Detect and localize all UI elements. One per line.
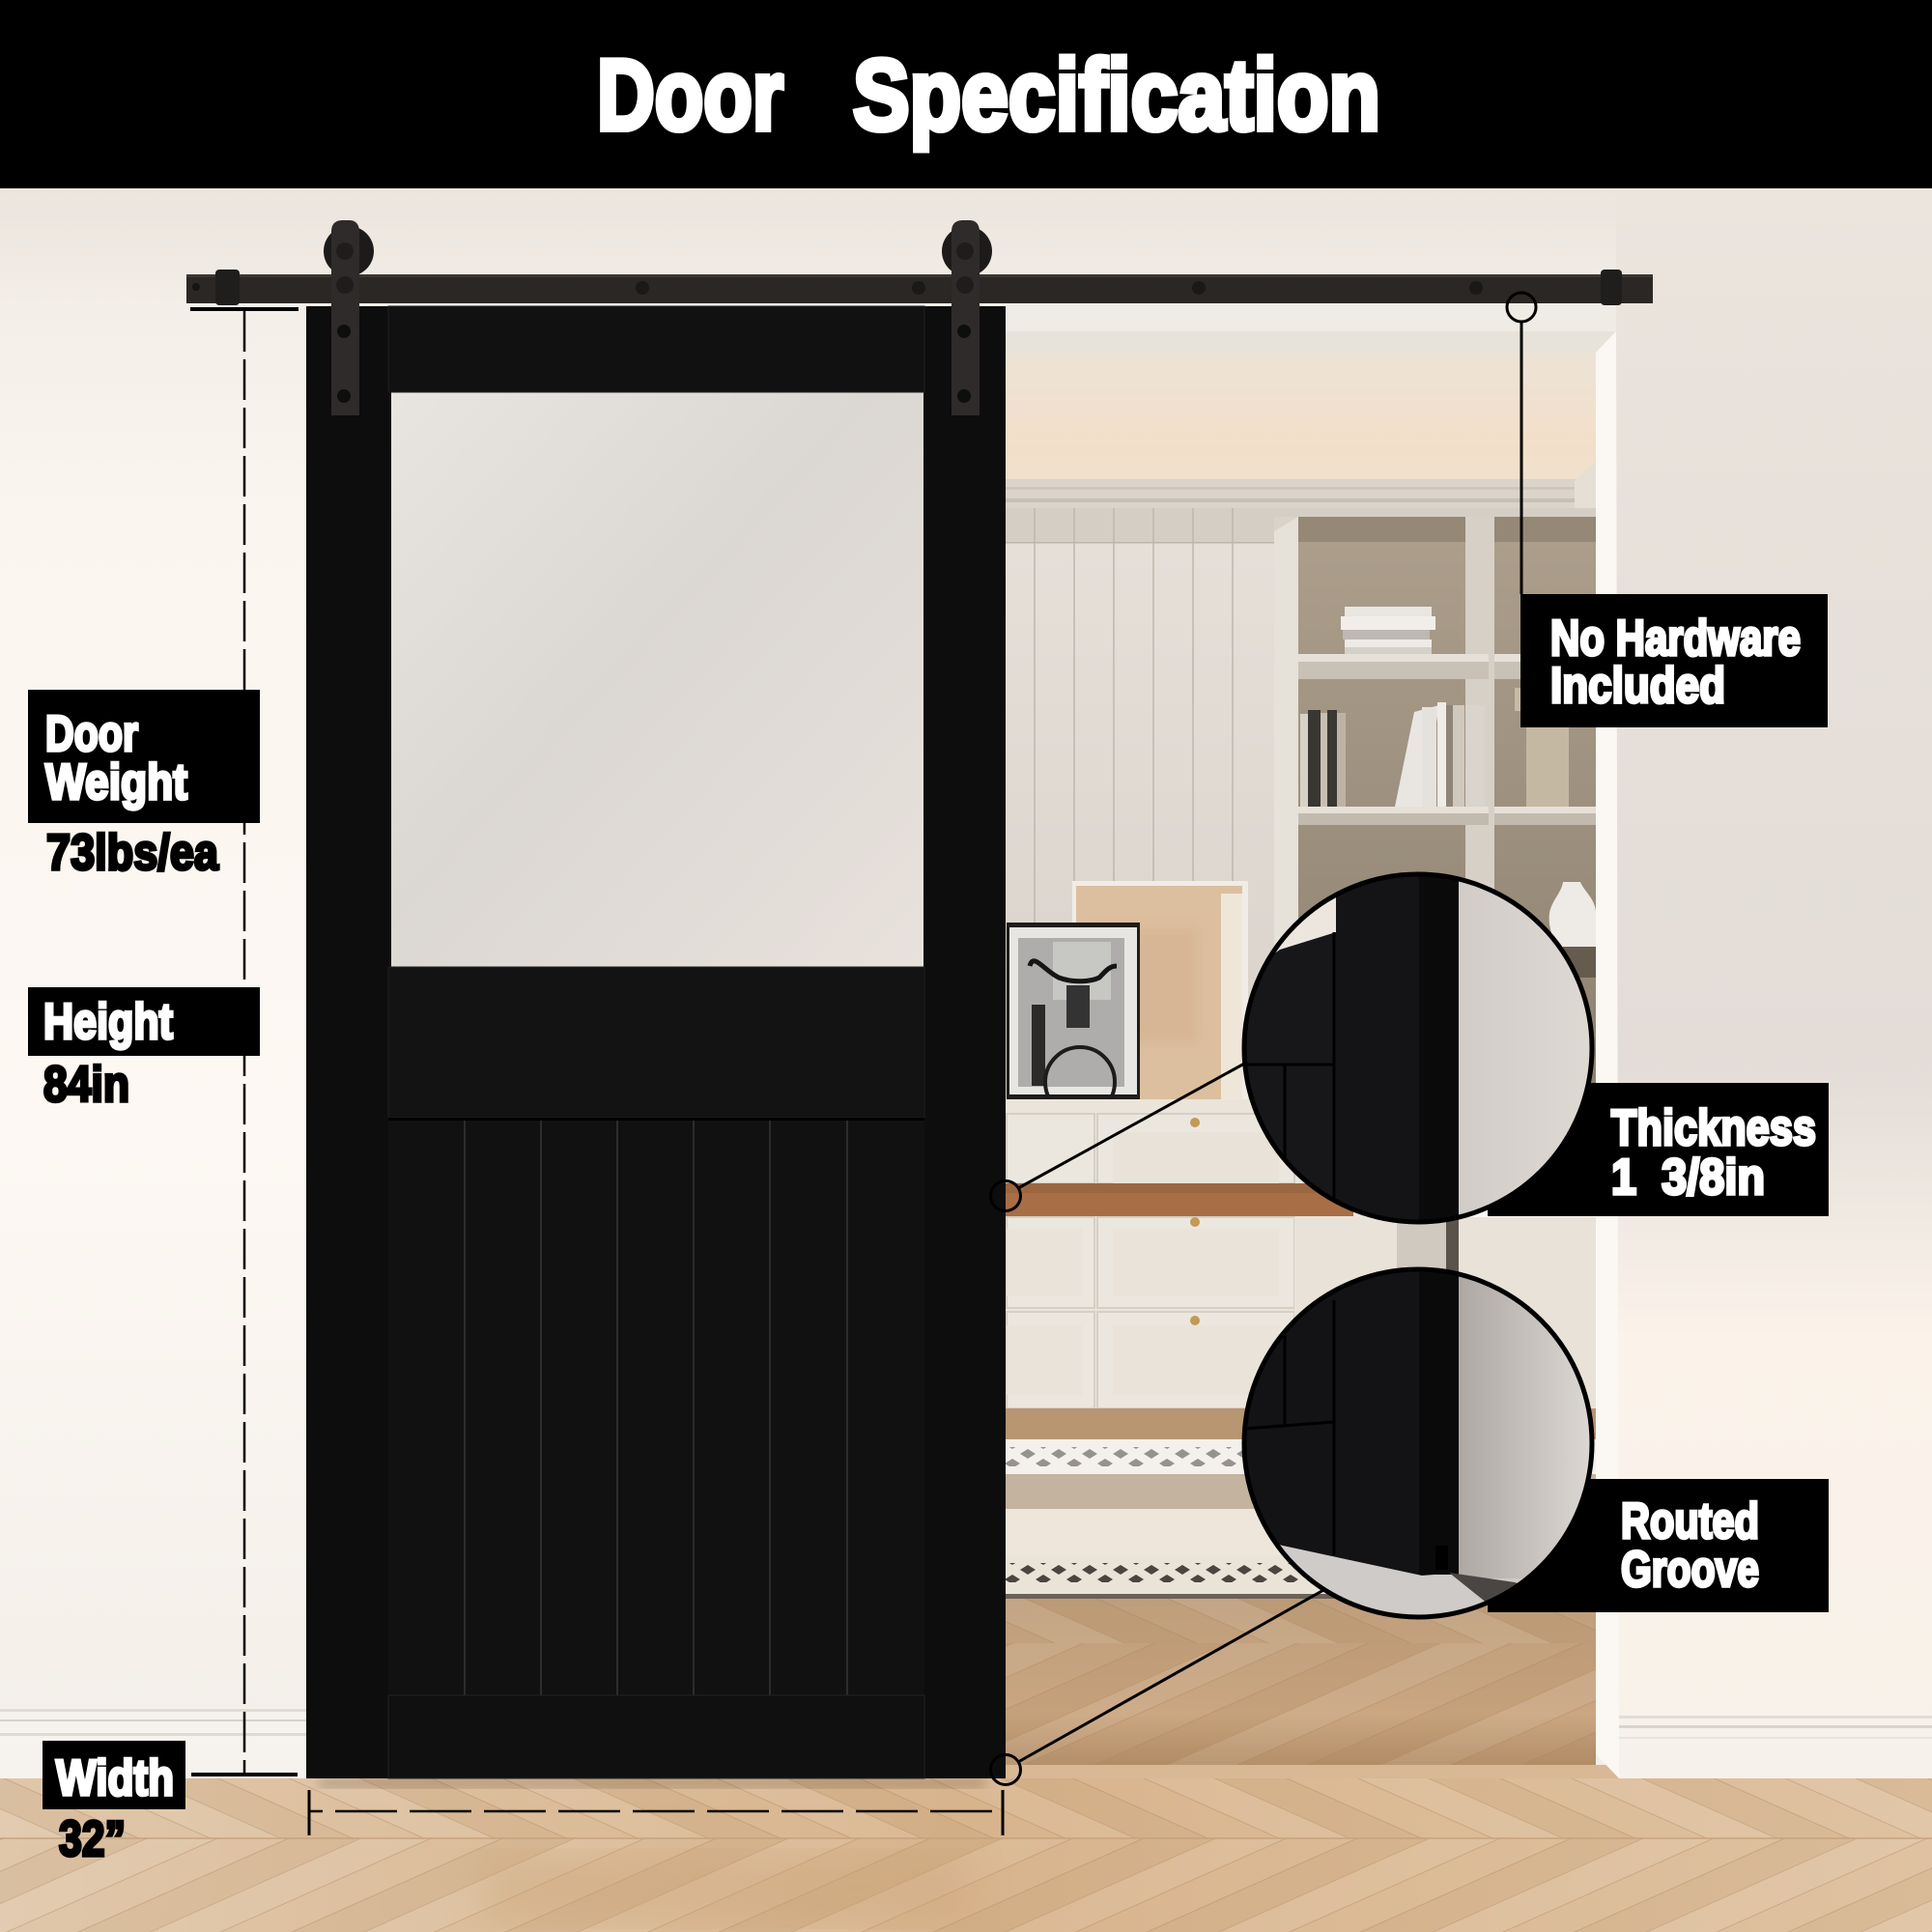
wooden counter [1006,1183,1353,1216]
height dimension line [190,309,298,1775]
callout pointer: thickness [991,1063,1246,1211]
crown moulding [1006,462,1596,508]
books upright left [1300,710,1346,807]
right baseboard [1619,1715,1932,1778]
value: door weight: 73lbs/ea [46,825,219,881]
soffit [1006,331,1616,353]
label box: no hardware included: No Hardware [1550,611,1801,667]
callout pointer: routed groove [991,1589,1325,1785]
label box: routed groove [1488,1479,1829,1612]
books under vase [1563,947,1596,978]
label box: routed groove: Groove [1621,1542,1759,1598]
label box: thickness: Thickness [1611,1100,1816,1156]
lower cabinets [1006,1099,1596,1410]
label box: thickness [1488,1083,1829,1216]
magnifier: door thickness [1244,874,1594,1227]
title: Door [597,40,783,152]
barn door [306,306,1006,1778]
ceiling glow [1006,353,1596,479]
hanger left [324,220,374,415]
framed bicycle photo [1007,923,1140,1117]
label box: no hardware included: Included [1550,658,1725,714]
label box: height: Height [43,994,173,1050]
interior herringbone floor [1006,1599,1596,1765]
door middle rail [388,967,924,1118]
callout pointer: no hardware [1507,293,1536,594]
door jamb [1596,331,1619,1778]
doorway interior room [1006,303,1616,1765]
books stack [1341,607,1435,654]
door planks [388,1118,924,1695]
label box: no hardware included [1520,594,1828,727]
vase [1549,882,1596,948]
label box: width: Width [56,1750,174,1806]
door floor shadow [319,1778,985,1788]
header above opening [1006,303,1616,331]
label box: door weight: Door [45,706,138,762]
bookcase [1274,517,1596,1106]
label box: door weight: Weight [45,754,187,810]
beadboard wall [1006,508,1596,1107]
label box: routed groove: Routed [1621,1493,1759,1549]
value: width: 32” [59,1811,126,1867]
wood floor foreground [0,1765,1932,1932]
left baseboard [0,1708,306,1778]
hanger right [942,220,992,415]
door bottom rail [388,1695,924,1778]
sliding rail [186,270,1653,305]
books upright right [1395,702,1485,807]
label box: thickness: 1 3/8in [1611,1150,1765,1206]
value: height: 84in [43,1057,129,1113]
door glass panel [391,392,923,967]
title bar [0,0,1932,188]
width dimension line [309,1790,1003,1835]
leaning artwork [1072,881,1248,1105]
title [597,40,1380,152]
decorative sculpture [1515,688,1580,807]
interior floor and rug [1006,1408,1596,1599]
label box: height [28,987,260,1056]
door top rail [388,306,924,392]
title: Specification [853,40,1380,152]
magnifier: routed groove [1244,1269,1594,1617]
label box: door weight [28,690,260,823]
